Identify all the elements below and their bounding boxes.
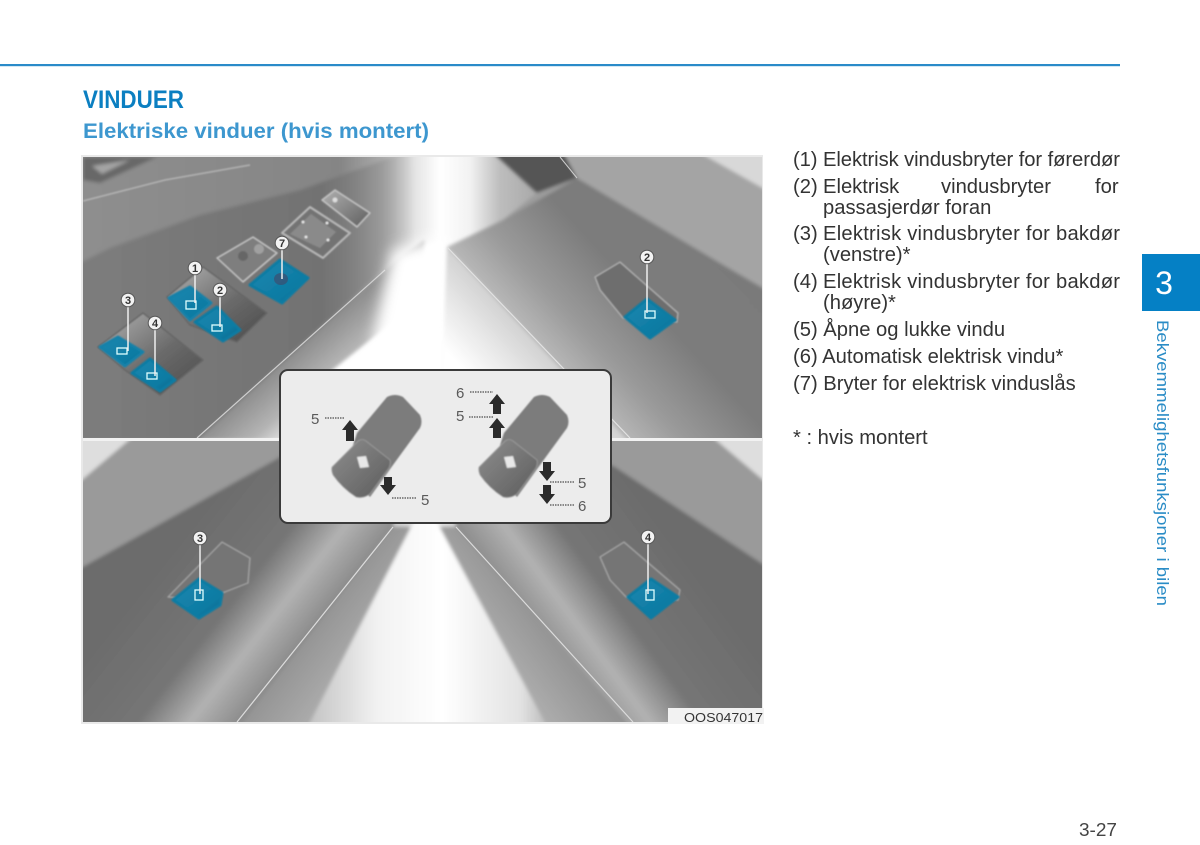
switch 2 [195, 307, 240, 341]
illustration: window switches in door panels [70, 145, 775, 730]
inset: operating the switch [280, 370, 611, 523]
legend list: (1) Elektrisk vindusbryter for førerdør [793, 149, 1120, 171]
switch: front passenger door [595, 250, 678, 338]
legend list: (5) Åpne og lukke vindu [793, 318, 1005, 341]
switch: automatic [479, 395, 568, 498]
mirror adjuster [282, 207, 350, 258]
legend list: * : hvis montert [793, 427, 928, 449]
callouts: position labels: 5 [311, 411, 319, 428]
header rule [0, 64, 1120, 66]
callouts: position labels: 5 [456, 408, 464, 425]
panel: driver door with switch cluster [83, 157, 538, 438]
badge 3 rear: 3 [197, 533, 203, 545]
legend list: vindusbryter [941, 176, 1051, 198]
callouts: position labels: 5 [421, 492, 429, 509]
badge 1 [188, 261, 202, 275]
badge 7: 7 [279, 238, 285, 250]
legend list [793, 149, 1120, 449]
legend list: for [1095, 176, 1119, 198]
switch: manual [332, 395, 422, 498]
badge 2 [213, 283, 227, 297]
legend list: Elektrisk vindusbryter for bakdør [823, 223, 1120, 245]
badge 2 passenger: 2 [644, 252, 650, 264]
legend list: passasjerdør foran [823, 197, 991, 219]
chapter tab: 3 [1155, 265, 1173, 301]
chapter title, vertical: Bekvemmelighetsfunksjoner i bilen [1153, 320, 1172, 606]
legend list: (7) Bryter for elektrisk vinduslås [793, 373, 1076, 395]
badge 2: 2 [217, 285, 223, 297]
legend list: (2) [793, 176, 818, 198]
callouts: position labels: 5 [578, 475, 586, 492]
switch 4 [132, 359, 175, 391]
bezel for switches 1 and 2 [167, 267, 267, 342]
legend list: Elektrisk [823, 176, 900, 198]
badge 7 [275, 236, 289, 250]
badge 3 [121, 293, 135, 307]
switch: rear right door [600, 530, 680, 618]
subheading: Elektriske vinduer (hvis montert) [83, 119, 429, 143]
badge 4 rear: 4 [645, 532, 652, 544]
callouts: position labels: 6 [456, 385, 464, 402]
badge 4: 4 [152, 318, 159, 330]
badge 4 [148, 316, 162, 330]
legend list: (6) Automatisk elektrisk vindu* [793, 346, 1064, 368]
switch 7 [250, 260, 308, 303]
lock mount [217, 237, 277, 282]
mirror fold switch [322, 190, 370, 227]
legend list: (venstre)* [823, 244, 911, 266]
badge 1: 1 [192, 263, 198, 275]
arrows: manual switch [342, 420, 396, 495]
image code: OOS047017 [684, 710, 763, 725]
badge 3: 3 [125, 295, 131, 307]
legend list: (4) [793, 271, 818, 293]
switch cluster: driver door [98, 190, 370, 395]
callouts: position labels: 6 [578, 498, 586, 515]
panel: front passenger door [440, 150, 775, 445]
switch 3 [100, 337, 143, 366]
image code [668, 708, 764, 725]
title: VINDUER [83, 86, 184, 114]
switch 1 [169, 287, 211, 320]
switch: rear left door [168, 531, 250, 618]
legend list: (3) [793, 223, 818, 245]
legend list: Elektrisk vindusbryter for bakdør [823, 271, 1120, 293]
arrows: automatic switch [489, 394, 555, 504]
chapter tab [1142, 254, 1200, 311]
callouts: position labels [311, 385, 586, 515]
bezel for switches 3 and 4 [98, 313, 203, 395]
legend list: (høyre)* [823, 292, 896, 314]
page number: 3-27 [1079, 820, 1117, 840]
panel: rear doors [70, 435, 775, 730]
